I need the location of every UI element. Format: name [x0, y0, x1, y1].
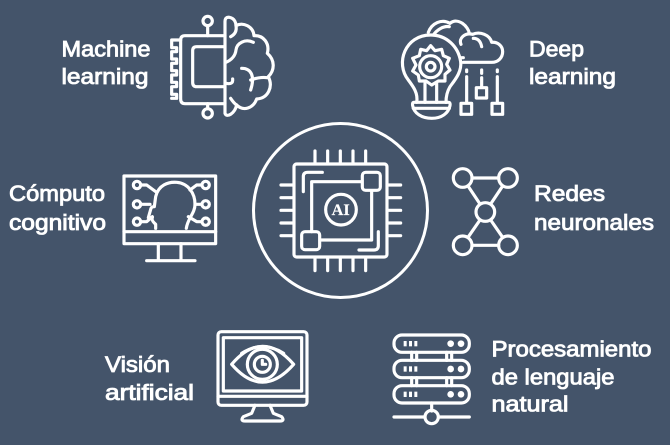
- icon: neural network: [453, 169, 517, 255]
- icon: monitor with eye: [218, 332, 307, 421]
- icon: AI chip: [281, 151, 401, 271]
- icon: light bulb with gear and cloud: [402, 21, 503, 118]
- center circle: [254, 124, 428, 298]
- label: Visión artificial: [105, 352, 194, 405]
- label: Cómputo cognitivo: Cómputo: [9, 181, 105, 206]
- label: AI: AI: [332, 202, 350, 219]
- label: Procesamiento de lenguaje natural: natural: [492, 392, 568, 416]
- label: Redes neuronales: [534, 181, 654, 235]
- icon: chip and brain: [172, 16, 273, 118]
- label: Visión artificial: Visión: [105, 352, 170, 377]
- label: Procesamiento de lenguaje natural: de lenguaje: [492, 364, 614, 390]
- label: Cómputo cognitivo: cognitivo: [9, 210, 106, 235]
- label: Machine learning: Machine: [62, 36, 150, 62]
- label: Redes neuronales: neuronales: [534, 210, 654, 235]
- label: Visión artificial: artificial: [105, 380, 194, 405]
- label: Redes neuronales: Redes: [534, 181, 605, 206]
- icon: monitor with head: [124, 176, 216, 261]
- label: Procesamiento de lenguaje natural: [492, 336, 652, 416]
- label: Machine learning: [62, 36, 150, 89]
- label: Procesamiento de lenguaje natural: Procesamiento: [492, 336, 652, 362]
- label: Machine learning: learning: [62, 64, 148, 89]
- label: Deep learning: learning: [529, 64, 616, 89]
- icon: server stack: [394, 335, 469, 424]
- label: Deep learning: Deep: [529, 36, 584, 62]
- label: Cómputo cognitivo: [9, 181, 106, 235]
- label: Deep learning: [529, 36, 616, 89]
